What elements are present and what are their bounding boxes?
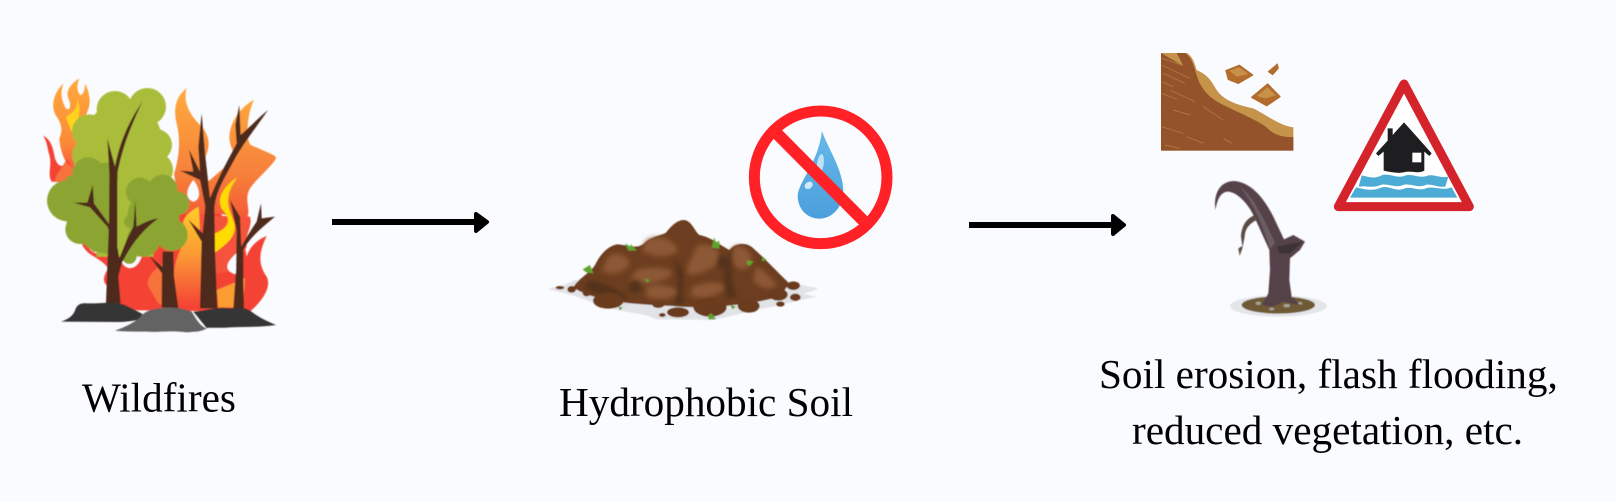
tree canopy: light green (72, 88, 173, 257)
ground shadow (548, 280, 818, 320)
icon: landslide (1161, 53, 1293, 151)
soil highlights (602, 237, 777, 299)
soil texture streaks (1162, 58, 1232, 148)
falling rocks (1226, 64, 1280, 106)
icon: soil pile (548, 220, 818, 320)
trunk (1215, 181, 1305, 307)
label: Wildfires: Wildfires (82, 374, 236, 420)
tree canopy: dark green (47, 157, 189, 264)
house (1376, 122, 1432, 173)
main red flame mass (82, 210, 268, 312)
yellow flame (215, 177, 237, 253)
flame holes (87, 180, 240, 274)
ground (1230, 295, 1327, 317)
withered branch (1238, 215, 1257, 256)
icon: burning trees (43, 78, 276, 332)
panel: hydrophobic soil (548, 111, 887, 425)
panel: wildfires (43, 78, 276, 420)
arrow: hydrophobic soil to consequences (969, 216, 1124, 234)
icon: flood warning sign (1338, 84, 1469, 207)
arrow: wildfires to hydrophobic soil (332, 214, 487, 231)
tree trunks (73, 102, 275, 308)
icon: no water sign (754, 111, 887, 244)
label: consequences: Soil erosion, flash flooding, (1099, 351, 1558, 397)
water drop (798, 131, 843, 219)
rocks (61, 303, 276, 332)
grass tufts (583, 237, 767, 319)
prohibition ring (754, 111, 887, 244)
icon: dead tree (1215, 181, 1327, 317)
left flames (43, 78, 90, 183)
panel: consequences (1099, 53, 1558, 453)
label: consequences: reduced vegetation, etc. (1132, 407, 1523, 453)
orange flame mass (174, 88, 276, 218)
soil clods (556, 281, 801, 317)
soil shadows (583, 249, 737, 305)
label: consequences (1099, 351, 1558, 453)
label: Hydrophobic Soil: Hydrophobic Soil (559, 379, 853, 425)
soil mound (573, 220, 789, 307)
prohibition slash (777, 134, 863, 221)
ground stones (1256, 302, 1302, 310)
flood waves (1359, 175, 1448, 187)
central orange flame (174, 207, 202, 307)
